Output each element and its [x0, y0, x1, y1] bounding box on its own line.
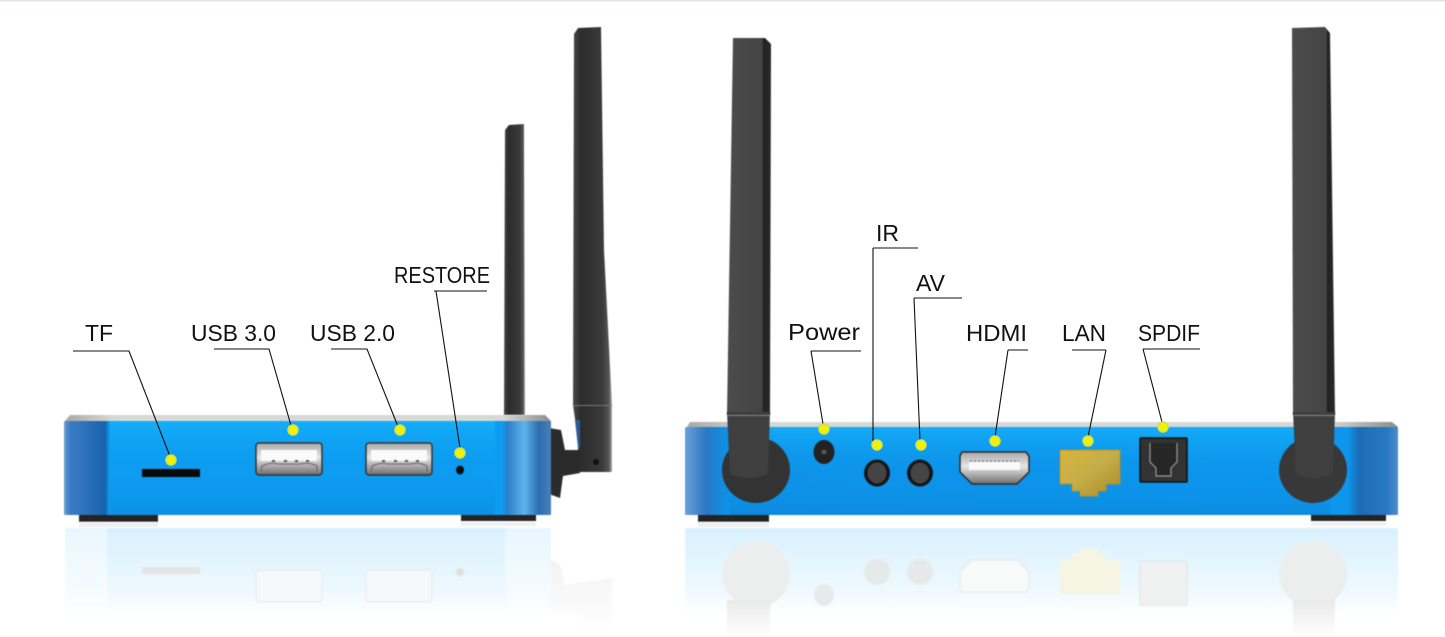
label: Power: Power [788, 319, 860, 345]
USB 3.0 port [256, 443, 322, 475]
label: LAN: LAN [1062, 320, 1106, 346]
label: IR [872, 220, 918, 450]
top border line [0, 0, 1445, 2]
power jack [814, 440, 834, 464]
left device reflection [65, 522, 612, 632]
tall antenna with hinge, left device [549, 27, 612, 498]
label: HDMI [966, 320, 1028, 446]
short rear antenna, left device [504, 124, 525, 415]
right antenna with base, right device [1292, 27, 1335, 415]
label: USB 3.0: USB 3.0 [191, 320, 276, 346]
SPDIF port [1140, 438, 1187, 482]
label: USB 2.0 [310, 320, 405, 435]
label: USB 3.0 [191, 320, 298, 435]
label: SPDIF: SPDIF [1138, 320, 1200, 346]
IR jack [864, 460, 890, 486]
label: TF [73, 320, 176, 465]
left device feet [79, 515, 536, 522]
label: AV [914, 270, 962, 450]
label: SPDIF [1138, 320, 1200, 432]
label: LAN [1062, 320, 1106, 446]
antenna bases, right device [722, 412, 1347, 503]
LAN port [1060, 450, 1120, 496]
label: Power [788, 319, 861, 434]
label: HDMI: HDMI [966, 320, 1027, 346]
TF card slot [142, 469, 200, 477]
label: TF: TF [85, 320, 113, 346]
label: RESTORE [394, 262, 490, 458]
restore pinhole [456, 466, 464, 474]
label: RESTORE: RESTORE [394, 262, 490, 288]
left antenna with base, right device [727, 38, 771, 415]
right device body [685, 422, 1398, 522]
right device reflection [685, 522, 1398, 637]
label: IR: IR [876, 220, 899, 246]
USB 2.0 port [366, 443, 432, 475]
left device body [64, 415, 551, 522]
label: USB 2.0: USB 2.0 [310, 320, 395, 346]
right device feet [698, 515, 1386, 522]
HDMI port [960, 452, 1029, 484]
label: AV: AV [916, 270, 946, 296]
AV jack [907, 460, 933, 486]
